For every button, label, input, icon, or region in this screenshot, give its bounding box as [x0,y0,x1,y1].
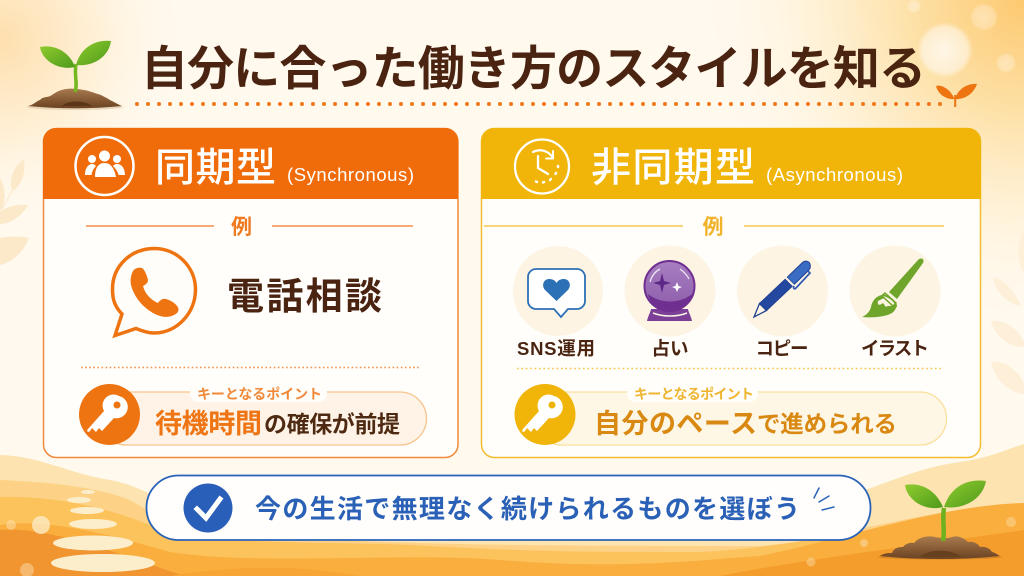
icon: check mark [184,484,232,532]
text: 電話相談: 電話相談 [227,276,382,317]
callout: bottom advice [146,476,870,540]
divider label: example: 例 [231,216,252,239]
icon: paintbrush [862,259,924,317]
key point callout [514,384,946,445]
icon: phone speech bubble [112,248,196,336]
divider label: example: 例 [702,216,724,239]
example: fortune telling: 占い [651,338,689,359]
example: SNS [513,246,603,359]
example: fortune telling [624,246,716,359]
decorative leaves: right edge [991,230,1024,394]
title: 自分に合った働き方のスタイルを知る [141,42,926,95]
panel header [481,128,981,199]
label: key point: キーとなるポイント [634,386,754,402]
subheading: Synchronous: (Synchronous) [287,164,414,185]
icon: people [76,137,134,195]
panel: synchronous [43,128,458,458]
example: copywriting [737,246,828,359]
title dotted underline [137,102,944,106]
icon: clock [515,140,569,194]
heading: 非同期型: 非同期型 [591,146,755,190]
key point callout: で進められる [757,411,897,437]
landscape: bottom waves [0,444,1024,576]
label: key point: キーとなるポイント [197,386,322,402]
stepping stones path [6,490,1016,576]
icon: small orange sprout [936,84,977,107]
panel: asynchronous [481,128,981,458]
decorative leaves: left edge [0,160,29,265]
icon: heart bubble [528,269,585,317]
text: advice: 今の生活で無理なく続けられるものを選ぼう [255,494,800,524]
example: illustration: イラスト [861,338,929,359]
illustration: top-left sprout [27,41,123,110]
heading: 同期型: 同期型 [155,146,276,190]
text: waiting time: 待機時間 [155,409,262,439]
icon: pen [754,261,810,317]
panel header [43,128,458,199]
subheading: Asynchronous: (Asynchronous) [766,164,903,185]
icon: sparkle lines [814,488,834,510]
text: own pace: 自分のペース [594,409,757,439]
example: SNS: SNS運用 [517,338,595,359]
icon: key [514,384,576,445]
key point callout: の確保が前提 [264,411,400,437]
icon: crystal ball [644,261,694,321]
illustration: bottom-right sprout [878,480,1002,560]
icon: key [79,384,140,445]
key point callout [79,384,426,445]
example: illustration [850,246,940,359]
example: copywriting: コピー [756,338,808,359]
